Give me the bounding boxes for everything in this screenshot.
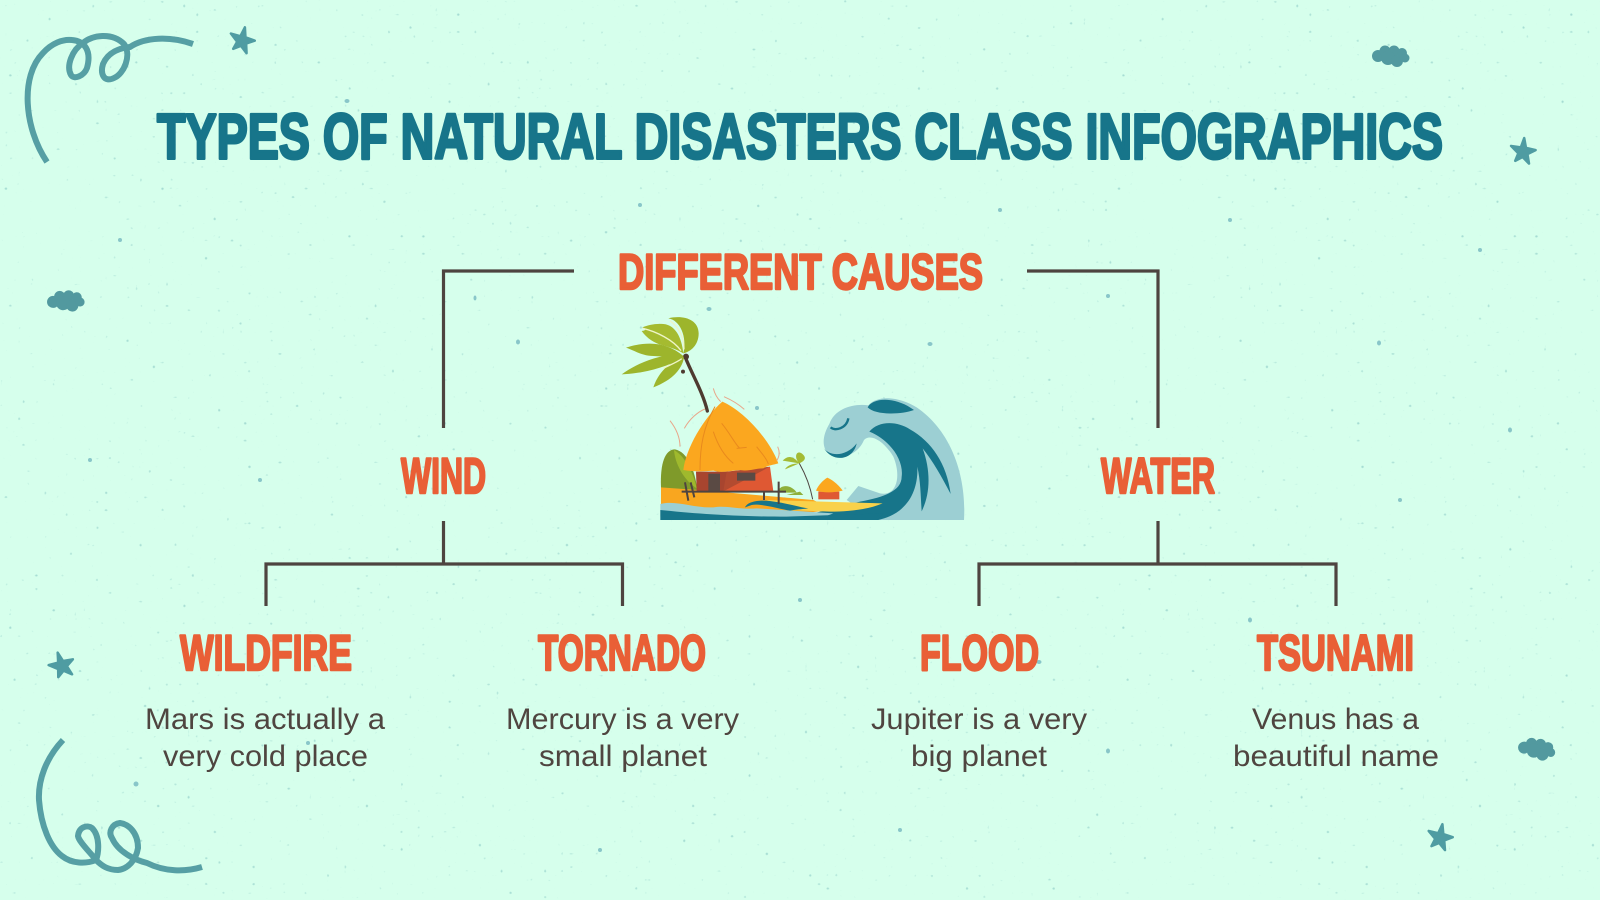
text: wildfire description: very cold place	[163, 740, 368, 773]
connector: water branches	[979, 521, 1336, 606]
icon: star bottom-right	[1426, 822, 1455, 851]
icon: star top-left	[228, 25, 257, 54]
text: tsunami description	[1233, 703, 1439, 773]
big palm trunk	[685, 357, 707, 411]
text: tsunami description: beautiful name	[1233, 740, 1439, 773]
text: flood description: Jupiter is a very	[871, 703, 1087, 736]
icon: cloud top-right	[1372, 46, 1410, 67]
decoration: bottom-left swirl	[39, 740, 202, 870]
wave crest dark	[868, 400, 914, 413]
text: wildfire description: Mars is actually a	[145, 703, 385, 736]
illustration: island hut and tidal wave	[622, 317, 964, 520]
small hut	[818, 492, 839, 499]
wave shadow on curl	[824, 443, 857, 458]
hut wall	[696, 472, 728, 491]
connector: causes to water	[1027, 271, 1158, 428]
wind marks	[670, 388, 779, 461]
small palm	[799, 463, 813, 499]
text: flood description	[871, 703, 1087, 773]
icon: star top-right	[1510, 137, 1537, 164]
bush	[661, 449, 697, 490]
icon: star left	[46, 649, 77, 680]
icon: cloud bottom-right	[1517, 737, 1556, 762]
sand	[661, 487, 833, 517]
water	[660, 503, 833, 518]
text: flood description: big planet	[911, 740, 1048, 773]
decoration: top-left swirl	[28, 36, 193, 162]
pier	[682, 482, 786, 504]
hut roof	[683, 402, 778, 472]
wave inner curl	[787, 423, 951, 520]
column: wildfire	[145, 625, 385, 773]
heading: tornado: TORNADO	[538, 625, 706, 681]
heading: tsunami: TSUNAMI	[1257, 625, 1414, 681]
wave back	[824, 398, 964, 520]
heading: different causes: DIFFERENT CAUSES	[618, 244, 983, 300]
text: tornado description: small planet	[539, 740, 708, 773]
label: wind: WIND	[401, 448, 486, 504]
text: tsunami description: Venus has a	[1252, 703, 1419, 736]
heading: wildfire: WILDFIRE	[180, 625, 352, 681]
connector: wind branches	[266, 521, 622, 606]
column: flood	[871, 625, 1087, 773]
label: water: WATER	[1101, 448, 1215, 504]
big palm leaves	[668, 317, 699, 353]
connector: causes to wind	[444, 271, 574, 428]
icon: cloud left	[46, 289, 85, 313]
heading: flood: FLOOD	[920, 625, 1039, 681]
text: tornado description	[506, 703, 739, 773]
column: tsunami	[1233, 625, 1439, 773]
column: tornado	[506, 625, 739, 773]
text: tornado description: Mercury is a very	[506, 703, 739, 736]
text: wildfire description	[145, 703, 385, 773]
